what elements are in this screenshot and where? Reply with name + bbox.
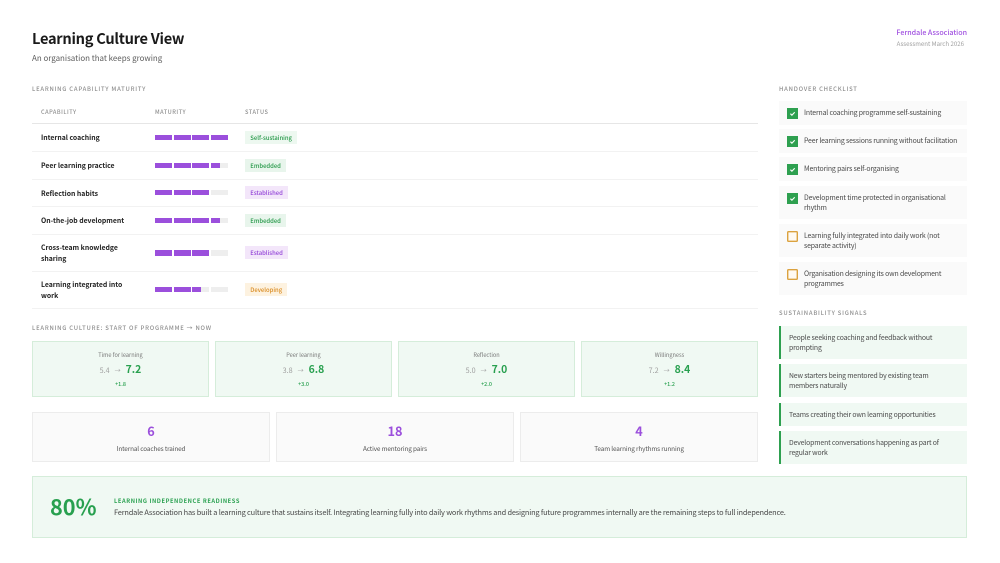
delta card: peer learning: +3.0 — [298, 380, 309, 388]
organisation name and date: Ferndale Association — [896, 28, 967, 38]
row: cross-team knowledge sharing — [41, 242, 118, 263]
delta card: peer learning: Peer learning — [286, 350, 321, 358]
stat card: mentoring pairs: Active mentoring pairs — [363, 444, 427, 452]
signal 4: Development conversations happening as part of — [789, 437, 939, 447]
checklist item 6: Organisation designing its own development — [804, 268, 941, 278]
signal 3 — [779, 403, 967, 426]
banner: learning independence readiness — [32, 476, 967, 538]
table: capability maturity: Embedded — [250, 216, 281, 225]
table: capability maturity: Established — [250, 188, 283, 197]
heading: sustainability signals: SUSTAINABILITY SIGNALS — [779, 308, 867, 316]
stat card: team rhythms: Team learning rhythms running — [594, 444, 684, 452]
row: peer learning practice: Peer learning practice — [41, 160, 115, 170]
heading: learning capability maturity: LEARNING CAPABILITY MATURITY — [32, 84, 146, 92]
checklist item 4: rhythm — [804, 202, 827, 212]
delta card: willingness — [581, 341, 758, 397]
row: internal coaching: Internal coaching — [41, 132, 100, 142]
checklist item 6 — [779, 262, 967, 295]
delta card: peer learning: 3.8 → 6.8 — [283, 361, 324, 376]
stat card: mentoring pairs — [276, 412, 514, 462]
signal 1: People seeking coaching and feedback without — [789, 332, 932, 342]
row: on-the-job development: On-the-job development — [41, 215, 124, 225]
delta card: willingness: 7.2 → 8.4 — [649, 361, 690, 376]
stat card: internal coaches: 6 — [147, 421, 155, 440]
table: capability maturity: Embedded — [250, 160, 281, 170]
delta card: reflection: Reflection — [473, 350, 500, 358]
checklist item 5 — [779, 224, 967, 257]
table: capability maturity: CAPABILITY — [41, 108, 77, 116]
checklist item 2 — [779, 129, 967, 152]
heading: handover checklist: HANDOVER CHECKLIST — [779, 84, 858, 92]
checklist item 1 — [779, 101, 967, 124]
subtitle: An organisation that keeps growing — [32, 52, 162, 64]
delta card: willingness: +1.2 — [664, 380, 675, 388]
table: capability maturity: MATURITY — [155, 108, 186, 116]
readiness percentage: 80% — [50, 491, 96, 522]
signal 2: members naturally — [789, 380, 847, 390]
row: cross-team knowledge sharing: sharing — [41, 252, 66, 262]
delta card: reflection — [398, 341, 575, 397]
signal 2: New starters being mentored by existing team — [789, 370, 929, 380]
checklist item 3 — [779, 157, 967, 180]
delta card: peer learning — [215, 341, 392, 397]
table: capability maturity: Established — [250, 248, 283, 257]
checklist item 5: Learning fully integrated into daily work (not — [804, 230, 940, 240]
checklist item 1: Internal coaching programme self-sustaining — [804, 107, 941, 117]
table: capability maturity: Developing — [250, 285, 282, 294]
delta card: willingness: Willingness — [655, 350, 684, 358]
delta card: time for learning: Time for learning — [98, 350, 143, 358]
stat card: team rhythms: 4 — [635, 421, 643, 440]
signal 4 — [779, 431, 967, 464]
table: capability maturity — [32, 108, 758, 309]
title: Learning Culture View — [32, 28, 184, 49]
row: learning integrated into work: work — [41, 290, 58, 300]
checklist item 6: programmes — [804, 278, 844, 288]
organisation name and date: Assessment March 2026 — [897, 39, 964, 48]
signal 2 — [779, 364, 967, 397]
signal 3: Teams creating their own learning opportunities — [789, 409, 936, 419]
row: cross-team knowledge sharing: Cross-team knowledge — [41, 242, 118, 252]
signal 4: regular work — [789, 447, 828, 457]
readiness label: LEARNING INDEPENDENCE READINESS — [114, 496, 240, 505]
organisation name and date — [896, 28, 967, 48]
stat card: internal coaches: Internal coaches trained — [117, 444, 185, 452]
row: reflection habits: Reflection habits — [41, 188, 98, 198]
checklist item 4: Development time protected in organisational — [804, 192, 946, 202]
checklist item 5: separate activity) — [804, 240, 856, 250]
delta card: time for learning: +1.8 — [115, 380, 126, 388]
delta card: reflection: 5.0 → 7.0 — [466, 361, 507, 376]
row: learning integrated into work — [41, 278, 122, 300]
delta card: time for learning: 5.4 → 7.2 — [100, 361, 141, 376]
stat card: team rhythms — [520, 412, 758, 462]
delta card: reflection: +2.0 — [481, 380, 492, 388]
delta card: time for learning — [32, 341, 209, 397]
checklist item 2: Peer learning sessions running without facilitation — [804, 135, 957, 145]
readiness text: Ferndale Association has built a learning culture that sustains itself. Integrating learning fully into daily work rhythms and designing future programmes internally are the remaining steps to full independence. — [114, 507, 786, 518]
checklist item 4 — [779, 186, 967, 218]
signal 1: prompting — [789, 342, 822, 352]
checklist item 3: Mentoring pairs self-organising — [804, 163, 899, 173]
stat card: mentoring pairs: 18 — [388, 421, 402, 440]
table: capability maturity: STATUS — [245, 108, 268, 116]
table: capability maturity: Self-sustaining — [250, 133, 292, 142]
heading: learning culture start to now: LEARNING CULTURE: START OF PROGRAMME → NOW — [32, 323, 212, 332]
signal 1 — [779, 326, 967, 359]
stat card: internal coaches — [32, 412, 270, 462]
row: learning integrated into work: Learning integrated into — [41, 278, 122, 288]
